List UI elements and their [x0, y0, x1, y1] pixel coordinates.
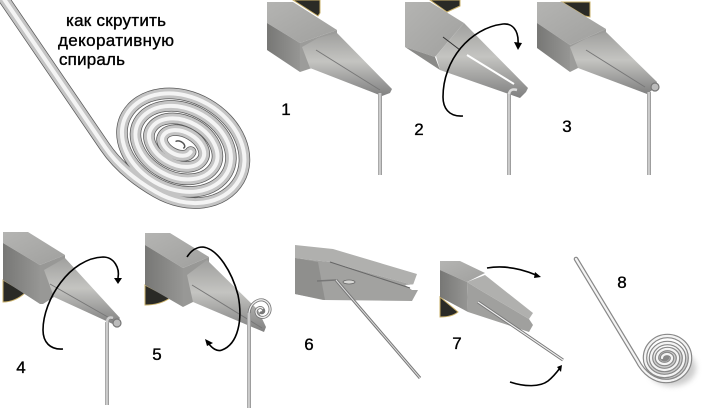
number 1: 1: [281, 100, 291, 119]
number 3: 3: [562, 117, 572, 136]
arrow: rotation: [43, 257, 122, 349]
arrow: rotation: [187, 247, 240, 351]
arrow: lower: [510, 365, 562, 386]
arrow: upper: [487, 267, 541, 278]
title: декоративную: [58, 31, 174, 50]
step 6: flat pliers holding wire: [295, 245, 420, 378]
number 5: 5: [152, 345, 162, 364]
step 1: pliers and wire: [267, 0, 392, 175]
step 5: pliers, larger coil and arrow: [145, 233, 270, 408]
step 8: finished spiral: [576, 259, 696, 386]
title: [58, 11, 174, 69]
number 2: 2: [414, 120, 424, 139]
number 8: 8: [617, 273, 627, 292]
number 7: 7: [452, 334, 462, 353]
large decorative spiral: [0, 0, 264, 225]
step 7: flat pliers with straightening arrows: [440, 261, 563, 386]
number 6: 6: [304, 335, 314, 354]
step 2: pliers, wire and rotation arrow: [405, 0, 528, 175]
number 4: 4: [16, 358, 26, 377]
step 3: pliers with first coil: [537, 2, 659, 175]
step 4: pliers, coil and arrow: [3, 232, 122, 405]
title: спираль: [59, 50, 125, 69]
title: как скрутить: [66, 11, 166, 30]
arrow: rotation: [443, 24, 522, 116]
